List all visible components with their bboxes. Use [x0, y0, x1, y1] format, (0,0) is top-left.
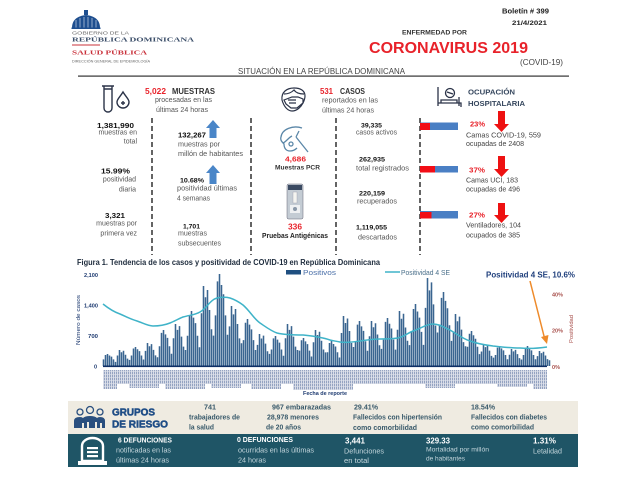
bar: ventiladores 27% — [420, 211, 458, 218]
stat: descartados: 1,119,055 — [356, 224, 387, 232]
grupos de riesgo heading: GRUPOS — [112, 408, 155, 418]
stat: 0 defunciones ocurridas: 24 horas — [238, 458, 267, 464]
stat: camas UCI: Camas UCI, 183 — [466, 178, 518, 184]
callout: positividad 10.6%: Positividad 4 SE, 10.6% — [486, 270, 575, 280]
stat: camas COVID-19: 23% — [470, 122, 486, 128]
stat: 6 defunciones notificadas: últimas 24 horas — [116, 458, 170, 464]
stat: embarazadas y menores — [266, 404, 331, 432]
title — [369, 30, 563, 67]
casos heading: últimas 24 horas — [322, 108, 375, 114]
y axis: positividad — [552, 292, 575, 371]
bulletin number and date: Boletín # 399 — [502, 8, 549, 16]
stat: positividad últimas 4 semanas: 4 semanas — [177, 196, 210, 202]
stat: ventiladores — [466, 212, 521, 240]
icon: blue up arrow — [206, 165, 220, 184]
baseline axis — [103, 366, 547, 367]
stat: muestras por millón: 132,267 — [178, 132, 206, 140]
stat: ventiladores: 27% — [469, 212, 486, 220]
icon: antigen test device — [287, 184, 303, 219]
grupos de riesgo heading: DE RIESGO — [112, 420, 168, 430]
stat: defunciones en total: Defunciones — [344, 448, 385, 456]
stat: diabetes: 18.54% — [471, 404, 496, 412]
stat: diabetes: Fallecidos con diabetes — [471, 414, 547, 422]
panel: muestras — [96, 86, 244, 248]
stat: hipertensión: 29.41% — [354, 404, 379, 412]
stat: letalidad — [533, 436, 562, 456]
stat: 0 defunciones ocurridas: 0 DEFUNCIONES — [237, 435, 293, 444]
stat: muestras por millón: millón de habitantes — [178, 151, 244, 158]
stat: muestras por primera vez — [96, 211, 138, 238]
y axis: número de casos: 1,400 — [84, 304, 98, 310]
stat: muestras por primera vez: muestras por — [96, 220, 138, 228]
stat: pruebas antigénicas — [262, 222, 328, 240]
logo: Gobierno de la República Dominicana: GOBIERNO DE LA — [72, 31, 129, 36]
stat: positividad diaria: positividad — [103, 176, 136, 184]
stat: camas COVID-19 — [466, 122, 541, 148]
stat: embarazadas y menores: 967 embarazadas — [272, 404, 331, 412]
panel: ocupación hospitalaria — [420, 87, 541, 240]
chart: positivos and positividad — [76, 270, 575, 397]
stat: muestras subsecuentes: subsecuentes — [178, 240, 221, 248]
stat: trabajadores de la salud — [189, 404, 240, 432]
stat: defunciones en total: en total — [344, 458, 369, 465]
stat: muestras por millón — [178, 132, 244, 158]
stat: muestras subsecuentes — [178, 224, 221, 248]
stat: muestras en total — [97, 121, 137, 146]
bulletin number and date — [502, 8, 549, 27]
y axis: número de casos: Número de casos — [76, 295, 82, 345]
logo: Gobierno de la República Dominicana — [72, 10, 195, 64]
stat: trabajadores de la salud: la salud — [189, 424, 214, 432]
stat: hipertensión: como comorbilidad — [353, 425, 417, 432]
casos heading: 531 — [320, 87, 334, 96]
stat: positividad diaria: diaria — [119, 186, 136, 194]
y axis: positividad: Positividad — [569, 315, 575, 343]
stat: 6 defunciones notificadas: 6 DEFUNCIONES — [118, 436, 172, 444]
icon: dome — [72, 10, 100, 29]
casos heading — [320, 87, 379, 114]
stat: positividad últimas 4 semanas: positividad últimas — [177, 186, 238, 192]
stat: muestras PCR — [275, 154, 320, 172]
bars: positivos — [104, 274, 550, 366]
casos heading: CASOS — [340, 87, 366, 96]
stat: positividad diaria — [101, 166, 136, 194]
muestras heading — [145, 87, 216, 114]
stat: mortalidad por millón: 329.33 — [426, 436, 451, 446]
stat: camas UCI: 37% — [469, 168, 486, 174]
stat: positividad diaria: 15.99% — [101, 166, 130, 176]
stat: muestras en total: muestras en — [98, 130, 137, 136]
line: positividad 4 SE — [103, 297, 547, 348]
icon: red down arrow — [494, 111, 509, 132]
stat: descartados — [356, 224, 398, 242]
stat: camas COVID-19: ocupadas de 2408 — [466, 141, 524, 148]
bar: camas UCI 37% — [420, 166, 458, 172]
stat: trabajadores de la salud: 741 — [204, 404, 216, 412]
ocupación heading — [468, 88, 526, 108]
stat: muestras PCR: Muestras PCR — [275, 164, 320, 172]
icon: red down arrow — [494, 156, 509, 177]
stat: descartados: descartados — [358, 234, 398, 242]
stat: casos activos — [356, 122, 397, 136]
stat: ventiladores: ocupados de 385 — [466, 232, 520, 240]
stat: 6 defunciones notificadas: notificadas en las — [116, 448, 172, 454]
grupos de riesgo heading — [112, 408, 168, 430]
logo: Gobierno de la República Dominicana: SALUD PÚBLICA — [72, 48, 147, 56]
panel: casos — [262, 87, 410, 242]
stat: camas COVID-19: Camas COVID-19, 559 — [466, 132, 541, 140]
ocupación heading: OCUPACIÓN — [468, 88, 515, 96]
muestras heading: procesadas en las — [155, 97, 212, 104]
stat: pruebas antigénicas: 336 — [288, 222, 303, 232]
y axis: número de casos: 2,100 — [84, 273, 98, 279]
stat: positividad últimas 4 semanas: 10.68% — [180, 178, 204, 184]
stat: total registrados: 262,935 — [359, 156, 385, 164]
stat: muestras subsecuentes: muestras — [178, 230, 207, 238]
stat: 6 defunciones notificadas — [116, 436, 172, 464]
y axis: número de casos: 0 — [94, 364, 97, 370]
x axis: date labels band — [103, 370, 547, 390]
stat: muestras subsecuentes: 1,701 — [183, 224, 200, 230]
dashed column dividers — [152, 118, 420, 255]
x axis title: Fecha de reporte — [303, 391, 347, 397]
stat: muestras en total: 1,381,990 — [97, 121, 134, 130]
stat: trabajadores de la salud: trabajadores de — [189, 414, 240, 422]
stat: hipertensión: Fallecidos con hipertensión — [353, 414, 442, 422]
icon: people — [74, 406, 105, 428]
stat: casos activos: casos activos — [356, 130, 397, 136]
stat: recuperados — [357, 190, 398, 206]
logo: Gobierno de la República Dominicana: REPÚBLICA DOMINICANA — [72, 36, 195, 44]
title: ENFERMEDAD POR — [402, 30, 467, 36]
stat: defunciones en total — [344, 436, 385, 465]
y axis: positividad: 20% — [552, 328, 563, 334]
stat: letalidad: 1.31% — [533, 436, 556, 446]
icon: hospital bed — [438, 87, 461, 107]
icon: tombstone — [78, 438, 107, 465]
stat: total registrados: total registrados — [356, 166, 410, 172]
muestras heading: últimas 24 horas — [156, 107, 209, 114]
muestras heading: MUESTRAS — [172, 87, 216, 96]
ocupación heading: HOSPITALARIA — [468, 99, 526, 108]
title: (COVID-19) — [520, 58, 563, 67]
stat: 0 defunciones ocurridas — [237, 435, 315, 464]
stat: embarazadas y menores: 28,978 menores — [267, 414, 319, 422]
stat: mortalidad por millón: Mortalidad por millón — [426, 446, 489, 454]
stat: letalidad: Letalidad — [533, 448, 562, 456]
stat: 0 defunciones ocurridas: ocurridas en las últimas — [238, 448, 315, 454]
stat: defunciones en total: 3,441 — [345, 436, 366, 446]
icon: head with swab — [281, 127, 308, 152]
legend: positivos — [286, 270, 337, 277]
y axis: positividad: 40% — [552, 292, 563, 298]
icon: test tube and drop — [102, 86, 129, 112]
section heading: SITUACIÓN EN LA REPÚBLICA DOMINICANA — [238, 66, 405, 76]
casos heading: reportados en las — [322, 98, 379, 104]
bulletin number and date: 21/4/2021 — [512, 20, 547, 27]
legend: positividad 4 SE: Positividad 4 SE — [401, 270, 450, 277]
stat: embarazadas y menores: de 20 años — [266, 424, 301, 432]
stat: muestras PCR: 4,686 — [285, 154, 306, 164]
stat: pruebas antigénicas: Pruebas Antigénicas — [262, 233, 328, 240]
stat: total registrados — [356, 156, 410, 172]
stat: mortalidad por millón — [426, 436, 489, 462]
panel: defunciones — [68, 434, 578, 467]
y axis: número de casos: 700 — [88, 334, 98, 340]
arrow: orange pointer — [530, 281, 548, 344]
icon: masked face — [282, 88, 305, 111]
stat: muestras en total: total — [124, 138, 137, 146]
stat: muestras por primera vez: primera vez — [100, 230, 137, 238]
logo: Gobierno de la República Dominicana: DIRECCIÓN GENERAL DE EPIDEMIOLOGÍA — [72, 58, 150, 64]
icon: blue up arrow — [206, 120, 220, 138]
stat: mortalidad por millón: de habitantes — [426, 456, 466, 462]
stat: positividad últimas 4 semanas — [177, 178, 238, 202]
stat: camas UCI: ocupadas de 496 — [466, 186, 520, 194]
bar: camas COVID-19 23% — [420, 122, 458, 130]
stat: muestras por millón: muestras por — [178, 142, 221, 148]
stat: ventiladores: Ventiladores, 104 — [466, 222, 521, 230]
stat: diabetes: como comorbilidad — [471, 424, 534, 432]
stat: muestras por primera vez: 3,321 — [105, 211, 125, 220]
figure heading: Figura 1. Tendencia de los casos y positividad de COVID-19 en República Dominicana — [77, 258, 381, 267]
stat: recuperados: 220,159 — [359, 190, 385, 198]
legend: positivos: Positivos — [303, 270, 337, 277]
y axis: número de casos — [76, 273, 98, 370]
stat: casos activos: 39,335 — [361, 122, 382, 130]
stat: recuperados: recuperados — [357, 198, 398, 206]
muestras heading: 5,022 — [145, 87, 167, 96]
title: CORONAVIRUS 2019 — [369, 40, 528, 57]
stat: hipertensión — [353, 404, 442, 432]
y axis: positividad: 0% — [552, 365, 560, 371]
icon: red down arrow — [494, 203, 509, 223]
stat: camas UCI — [466, 168, 520, 194]
stat: diabetes — [471, 404, 547, 432]
panel: grupos de riesgo — [68, 401, 578, 434]
